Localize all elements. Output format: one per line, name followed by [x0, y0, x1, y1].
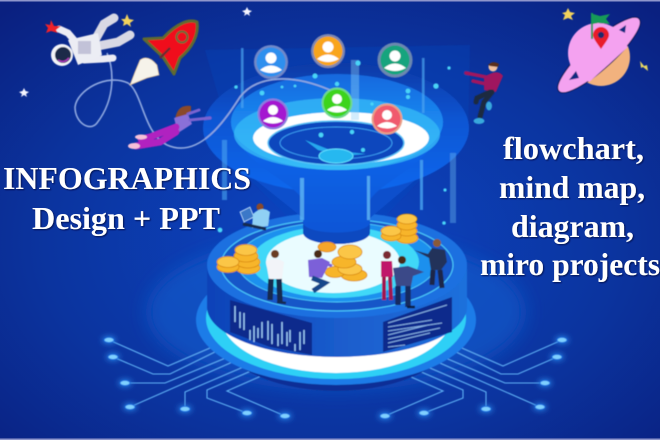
- gold coins: right stack: [381, 214, 418, 244]
- yellow star: [121, 14, 134, 27]
- shoes: [486, 102, 492, 110]
- pink body: [568, 23, 628, 83]
- heading line 2: Design + PPT: [32, 200, 220, 236]
- gold star: [562, 8, 575, 20]
- circuit traces: [109, 340, 562, 416]
- ring: [550, 8, 648, 102]
- glowing platform base: [196, 255, 476, 391]
- cylinder side: [207, 265, 467, 357]
- outer translucent disc: [203, 63, 469, 193]
- floating woman: [128, 106, 210, 149]
- person: kneeling purple: [308, 250, 332, 291]
- cylinder platform: [207, 212, 467, 357]
- gold coins: center pile: [318, 242, 367, 281]
- planet: [556, 8, 649, 94]
- hair: [175, 106, 191, 120]
- service: mind map: mind map,: [499, 169, 645, 205]
- heading: infographics design: [3, 160, 251, 236]
- small stars: [19, 7, 252, 97]
- torso and arms: [484, 72, 503, 92]
- service: flowchart: flowchart,: [503, 130, 644, 166]
- inner bright ring: [231, 74, 443, 170]
- body: [68, 33, 102, 65]
- lightning: [640, 61, 648, 71]
- glowing particles: [218, 60, 451, 232]
- avatar: orange: [311, 34, 345, 68]
- astronaut: [45, 18, 130, 66]
- service: miro projects: miro projects: [480, 246, 660, 282]
- peach back: [572, 28, 630, 86]
- shoes: [135, 134, 147, 140]
- tether line: [75, 53, 330, 148]
- torso and arms: [174, 114, 192, 133]
- avatar: purple: [258, 98, 288, 130]
- funnel: [203, 63, 469, 244]
- person: suit: [414, 239, 447, 288]
- map pin: [593, 27, 609, 49]
- person: white shirt: [266, 250, 286, 303]
- stem bottom band: [303, 222, 370, 244]
- arm to star: [59, 29, 74, 40]
- ring gaps: [569, 71, 579, 80]
- flame: [130, 58, 159, 85]
- circuit nodes: [102, 336, 569, 420]
- platform glow halo: [146, 234, 526, 390]
- helmet: [51, 44, 73, 66]
- platform top: [207, 212, 467, 318]
- avatar: coral: [372, 104, 402, 134]
- person: laptop: [240, 203, 270, 229]
- hair and head: [488, 62, 498, 72]
- text panel: [383, 297, 452, 352]
- service: diagram: diagram,: [511, 208, 634, 244]
- floating man: [466, 62, 503, 124]
- avatar: lime: [322, 88, 352, 118]
- cone down to stem: [212, 140, 463, 218]
- gold coins: left stack: [217, 244, 260, 274]
- avatar: green: [378, 42, 412, 78]
- light bars: [222, 48, 456, 223]
- funnel stem: [232, 125, 443, 244]
- flag: [591, 13, 593, 39]
- rocket body: [144, 21, 197, 74]
- avatar: blue: [254, 45, 288, 79]
- person: woman magenta: [381, 251, 393, 300]
- avatar icons: [254, 34, 412, 134]
- legs: [136, 127, 176, 146]
- limbs: [94, 18, 114, 42]
- chart panel: [230, 300, 312, 355]
- person: navy jacket: [393, 256, 424, 307]
- rocket: [130, 21, 197, 85]
- light beam behind funnel: [205, 45, 470, 232]
- red star: [45, 20, 61, 33]
- services list: [480, 130, 660, 282]
- legs: [476, 92, 492, 117]
- heading line 1: INFOGRAPHICS: [3, 160, 251, 196]
